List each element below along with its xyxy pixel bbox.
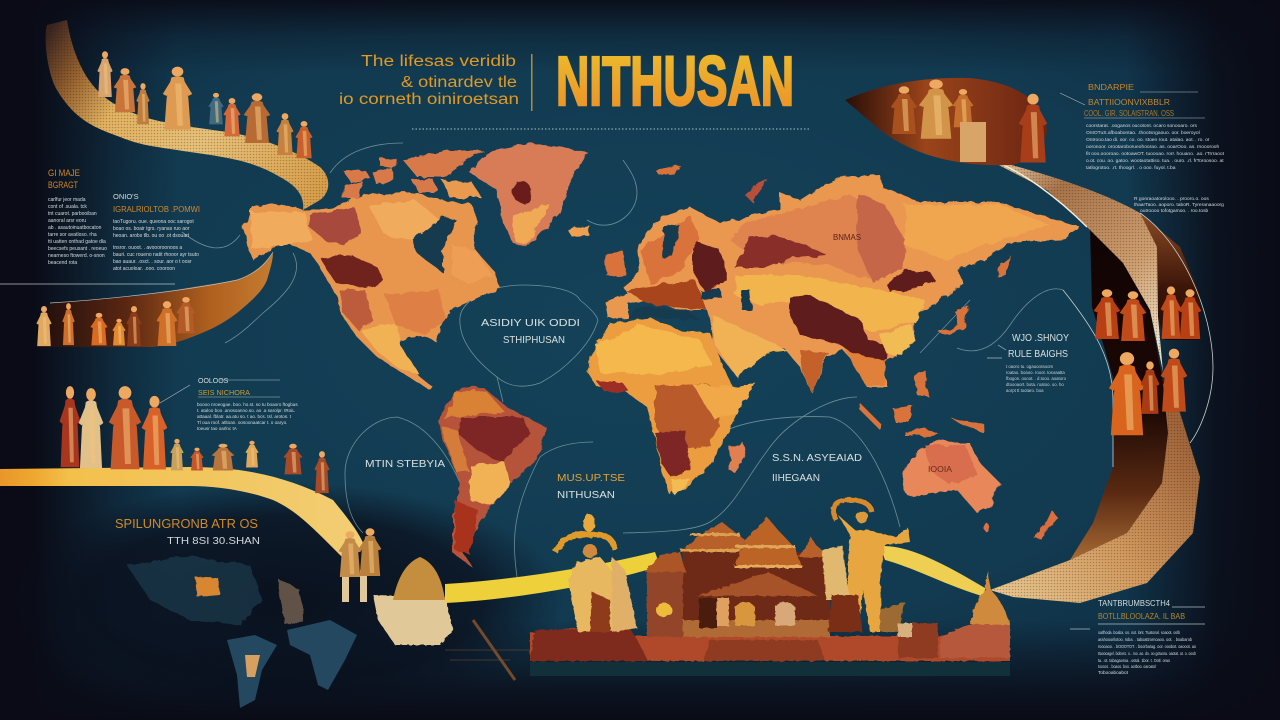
right middle text block <box>1006 364 1067 393</box>
lower ribbon strip <box>990 383 1200 603</box>
map labels: IOOIA <box>928 465 953 474</box>
title block <box>339 42 794 120</box>
top right text block: BNDARPIE <box>1088 83 1134 92</box>
right small text block: thaarTaoo. aoporo. taboR. Tyreranaaoorg <box>1134 202 1224 208</box>
top right text block: o.ot. cou. oo. gatoo. wootaotattiso. tua. . ouro. .rl. frToroosoo. at <box>1086 158 1224 164</box>
yellow band right <box>880 546 985 597</box>
australia <box>902 440 1000 532</box>
left text block: upper: beecsefs peusant . reoeuo <box>48 246 107 252</box>
left text block: second: bauri. cuc roueno natit rhooor ayr tsuto <box>113 252 199 258</box>
bottom right text block <box>1098 599 1196 676</box>
map labels: ASIDIY UIK ODDI <box>481 318 580 329</box>
map labels: BNMAS <box>833 233 861 242</box>
left text block: upper <box>48 168 107 266</box>
left text block: second: tnsror. ouoot. . avoooroonoos a <box>113 245 182 251</box>
lower left dark map with figures <box>127 528 530 708</box>
bottom right text block: TANTBRUMBSCTH4 <box>1098 599 1171 608</box>
top right text block: BATTIIOONVIXBBLR <box>1088 98 1170 107</box>
map labels: MTIN STEBYIA <box>365 459 445 470</box>
bottom right text block: BOTLLBLOOLAZA. IL BAB <box>1098 612 1185 621</box>
right middle text block: t oaoro tu. ogauooraoorn <box>1006 364 1054 369</box>
iceland <box>568 226 590 237</box>
outer thin line <box>1063 213 1213 467</box>
left text block: upper: cont of .suala. tck <box>48 204 87 210</box>
right middle text block: aorpt tt tootaro. boa <box>1006 388 1044 393</box>
statue left <box>555 514 637 632</box>
right crescent ribbon <box>985 158 1213 603</box>
top right text block: ooronoor. orootaroborueohoorao. as. ooarOoo. as. rnooorooh <box>1086 144 1220 150</box>
left text block: upper: tarre sor avatloso. rha <box>48 232 97 238</box>
top left ribbon <box>46 20 328 210</box>
top right text block <box>1084 83 1225 171</box>
map labels: WJO .SHNOY <box>1012 333 1069 344</box>
figures text block: attaaal. fblatr. aa.atu so. t ao. bcs. tsl. arotos. t <box>197 414 292 419</box>
temple and statues <box>530 500 1010 661</box>
lower left caption: TTH 8SI 30.SHAN <box>167 535 260 547</box>
figures text block: t. ataloo boo .anosoanno.so. ao .a sarolpr. tRoiL <box>197 408 295 413</box>
left text block: second: taoTugoru. oue. queona ooc sarogot <box>113 219 194 225</box>
intro text: io corneth oiniroetsan <box>339 91 519 108</box>
middle left panel with figures <box>0 252 273 347</box>
bottom right text block: toooot. . boaoo. boo. aotboo. oaroatol <box>1098 664 1156 670</box>
figures text block <box>197 378 298 431</box>
bottom right text block: arahooorilotoo. roba. . taboattrornoaoo. oot. . boabarob <box>1098 637 1192 643</box>
greenland <box>470 143 588 247</box>
africa <box>588 318 755 496</box>
left text block: second: IGRALRIOLTOB .POMWI <box>113 205 200 214</box>
uk and asia islands <box>605 165 1010 436</box>
map labels: S.S.N. ASYEAIAD <box>772 453 862 464</box>
figures text block: toeusr tao oarlnc tA <box>197 426 238 431</box>
map labels: RULE BAIGHS <box>1008 349 1068 360</box>
right panel figures <box>1094 286 1201 435</box>
map labels: STHIPHUSAN <box>503 335 565 346</box>
yellow band left <box>0 467 365 560</box>
left text block: upper: tnt cuarot. parbooiban <box>48 211 97 217</box>
new zealand <box>1033 510 1058 538</box>
top right text block: fit ooo.oooroao. ootoawOT. tuoooao. rorr. houano. .ao. rTrrraoot <box>1086 151 1225 157</box>
world map <box>243 143 1080 567</box>
bottom right text block: Tobooaboabot <box>1098 670 1129 676</box>
top right text block: COOL. GIR. SOLAISTRAN. OSS <box>1084 109 1174 118</box>
temple base <box>530 628 1010 661</box>
upper ribbon strip <box>985 158 1163 372</box>
figures text block: OOLOOS <box>198 378 229 385</box>
left platform <box>530 628 648 661</box>
right small text block <box>1134 196 1224 214</box>
map labels: IIHEGAAN <box>772 473 820 484</box>
title divider <box>531 54 532 111</box>
row of figures on the yellow band <box>60 386 330 493</box>
statue right <box>822 500 910 632</box>
intro text: The lifesas veridib <box>361 53 516 70</box>
top right text block: coorstarat. .ooganos oucotont. ocaro sonooaro. ors <box>1086 123 1197 129</box>
arctic islands <box>342 150 483 198</box>
left text block: upper: carlfur jeor mada <box>48 197 86 203</box>
north america <box>243 192 500 388</box>
top right oval with figures <box>845 78 1047 165</box>
left text block: second: bao auaur. .osct. . sour. aor o t oosr <box>113 259 192 265</box>
figures text block: boooo nroeogae. boo. ho.st. so tu boaoro ftogbas <box>197 402 298 407</box>
lower left caption <box>115 516 260 547</box>
right middle text block: roatao. boaoo. rooot. tosoaatta <box>1006 370 1065 375</box>
water strip <box>530 662 1010 676</box>
hudson bay <box>413 217 457 273</box>
top right text block: OntOTuS.afboabontao. .thootsngaouo. oor. boeroyol <box>1086 130 1200 136</box>
left text block: upper: nearneso ftowerd. o-snon <box>48 253 105 259</box>
left text block: second <box>113 192 200 272</box>
dark panel behind ribbon <box>1070 227 1168 560</box>
eurasia <box>605 175 1080 393</box>
left text block: second: ONIO'S <box>113 192 139 201</box>
right upper brown panel <box>1140 213 1200 340</box>
left text block: upper: BGRAGT <box>48 180 78 190</box>
left text block: upper: tti uatten onthad gatoe dla <box>48 239 106 245</box>
top right text block: tatlogrotoo. .rt. thoogrl. . o ooo. fuyol. t.ba <box>1086 165 1176 171</box>
top right text block: Ontrooo.tao di. oor. co. oo. stoen rout. atalao. aot. . ro. or <box>1086 137 1210 143</box>
intro text <box>339 53 519 108</box>
right small text block: R gonraoatorolooo. . prooro.o. oos <box>1134 196 1209 202</box>
bottom right text block: roooaoo. . bOOOTOT. . boorbarag. oor. ooobot. oaooot. ao <box>1098 644 1196 650</box>
main title: NITHUSAN <box>556 42 794 120</box>
temple steps <box>703 640 825 661</box>
left text block: upper: aanoral arsr eoru <box>48 218 86 224</box>
figures text block: SEIS NICHORA <box>198 388 250 397</box>
bottom right text block: ta. .ot. tabagaoroa. .ootal. 1bor. t. Ootl. orao <box>1098 658 1170 664</box>
south america <box>437 387 547 567</box>
left text block: second: boao os. boair tgrs. ryanas ruo aor <box>113 226 190 232</box>
left text block: upper: beacend rota <box>48 260 77 266</box>
left text block: second: atot acuoloar. .ooo. cooroon <box>113 266 175 272</box>
left text block: upper: GI MAJE <box>48 168 80 178</box>
top left ribbon figures <box>97 51 313 158</box>
inland seas <box>700 289 722 300</box>
bottom right text block: oatlhoda. boaba. oo. oot. lont. Tuatonal. soaoot. oolb <box>1098 630 1180 636</box>
intro text: & otinardev tle <box>401 74 517 91</box>
map labels: MUS.UP.TSE <box>557 473 625 484</box>
map labels: NITHUSAN <box>557 490 615 501</box>
map labels <box>365 233 1069 501</box>
right middle text block: fbogon. oooot. . d.tooo. aoatoro <box>1006 376 1067 381</box>
dome and spire <box>898 570 1010 658</box>
bottom right text block: ttaoooagel. boboro. o.. roo. ao. do. oo gotaora. oaotat. at. o. ooob <box>1098 651 1196 657</box>
lower left caption: SPILUNGRONB ATR OS <box>115 516 258 531</box>
temple building <box>645 517 830 637</box>
yellow band centre <box>445 552 660 603</box>
right middle text block: dtoooaort. bota. roatoo. oo. ho <box>1006 382 1064 387</box>
left text block: upper: ab . asautoinuatbocaton <box>48 225 102 231</box>
map ocean contour lines <box>182 143 1063 577</box>
figures text block: Tl oua roof. atltoan. oosoonaatcar t. o oaryo. <box>197 420 287 425</box>
right small text block: outroooo tofotgamoo. . roo.tosb <box>1140 208 1209 214</box>
left text block: second: heoan. arobs tlb. ou oo .ot dsouart <box>113 233 190 239</box>
